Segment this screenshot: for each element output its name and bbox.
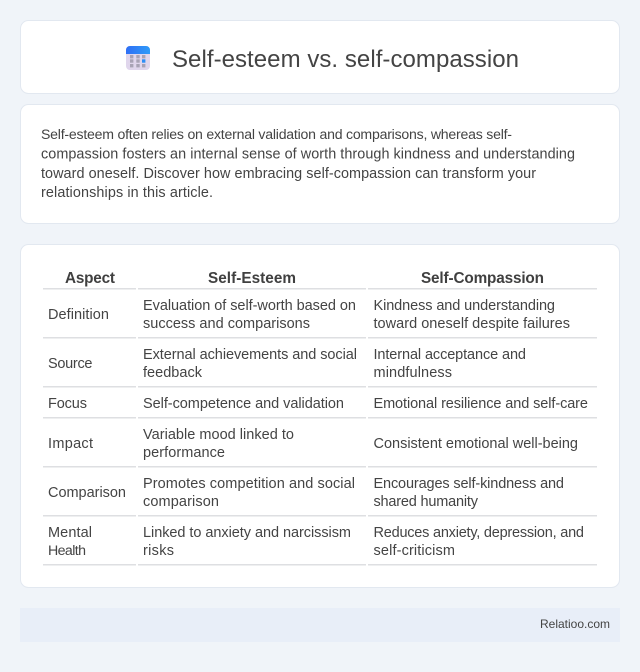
table row: source: feedback [143, 365, 203, 381]
table row: comparison: Comparison [48, 485, 126, 501]
table row: mental health: self-criticism [374, 543, 455, 559]
table row: definition: Evaluation of self-worth based on [143, 298, 356, 314]
table row: impact [43, 427, 597, 468]
table row: focus [43, 396, 597, 418]
table row: mental health [43, 525, 597, 566]
footer [20, 608, 620, 642]
table header row: Self-Esteem [208, 270, 296, 287]
table row: comparison: shared humanity [374, 494, 479, 510]
table header row: Aspect [65, 270, 115, 287]
table row: mental health: Mental [48, 525, 92, 541]
table row: mental health: Health [48, 543, 86, 559]
text block: introduction: compassion fosters an internal sense of worth through kindness and understanding [41, 146, 575, 162]
text block: introduction [41, 126, 575, 201]
table row: mental health: Reduces anxiety, depression, and [374, 525, 584, 541]
icon: calendar [126, 46, 150, 70]
table header row [43, 270, 597, 290]
table row: focus: Focus [48, 396, 87, 412]
table row: comparison: comparison [143, 494, 219, 510]
table row: mental health: risks [143, 543, 174, 559]
table row: definition: success and comparisons [143, 316, 310, 332]
table row: comparison: Encourages self-kindness and [374, 476, 564, 492]
footer credit: Relatioo.com [540, 617, 610, 631]
table row: focus: Emotional resilience and self-care [374, 396, 588, 412]
table row: comparison: Promotes competition and social [143, 476, 355, 492]
table row: impact: Impact [48, 436, 93, 452]
table row: source: Source [48, 356, 92, 372]
panel: comparison table [20, 244, 620, 588]
title: Self-esteem vs. self-compassion [172, 46, 519, 73]
table row: source [43, 347, 597, 388]
table row: impact: Consistent emotional well-being [374, 436, 578, 452]
table row: source: Internal acceptance and [374, 347, 526, 363]
panel: introduction [20, 104, 620, 224]
table row: definition: Kindness and understanding [374, 298, 555, 314]
text block: introduction: toward oneself. Discover how embracing self-compassion can transform your [41, 166, 536, 182]
panel: header [20, 20, 620, 94]
table row: definition [43, 298, 597, 338]
table row: definition: Definition [48, 307, 109, 323]
table row: focus: Self-competence and validation [143, 396, 344, 412]
table row: mental health: Linked to anxiety and narcissism [143, 525, 351, 541]
text block: introduction: relationships in this article. [41, 185, 213, 201]
table row: definition: toward oneself despite failures [374, 316, 570, 332]
table header row: Self-Compassion [421, 270, 544, 287]
table row: impact: performance [143, 445, 225, 461]
table row: source: External achievements and social [143, 347, 357, 363]
table row: impact: Variable mood linked to [143, 427, 294, 443]
table row: source: mindfulness [374, 365, 452, 381]
text block: introduction: Self-esteem often relies on external validation and comparisons, whereas self- [41, 126, 512, 142]
table row: comparison [43, 476, 597, 516]
